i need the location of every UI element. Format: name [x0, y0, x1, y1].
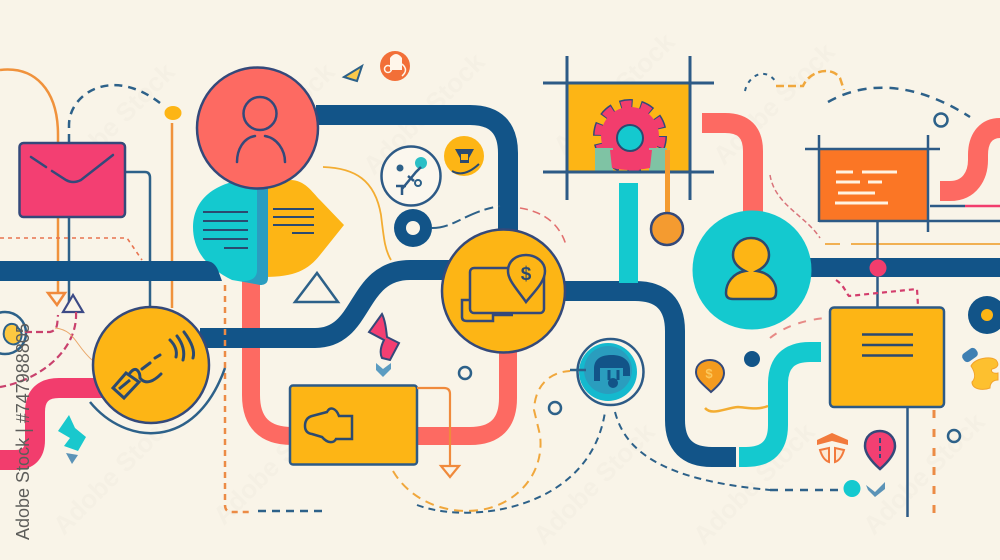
yellow bubble: [264, 180, 344, 277]
thin connector lines left: [0, 70, 172, 308]
left small icons: [0, 293, 92, 464]
gear panel: [543, 56, 714, 200]
centre strip: [240, 180, 268, 285]
coral S pipe: [940, 128, 1000, 191]
thin yellow curve: [323, 167, 391, 260]
navy pipe center: [200, 270, 450, 338]
triangle outline: [295, 273, 338, 302]
gear: [595, 105, 667, 172]
vertical credit text: Adobe Stock | #747988805: [13, 323, 33, 540]
faint watermark: Adobe Stock: [707, 36, 841, 170]
yellow panel: [568, 83, 690, 172]
pink triangle: [63, 295, 83, 312]
icon: yellow circle signal wand: [93, 307, 209, 423]
faint watermark: Adobe Stock: [47, 406, 181, 540]
icon: yellow circle with dollar pin: [442, 230, 565, 352]
icon: link and apple: [961, 346, 998, 389]
lines below note: [908, 407, 934, 517]
yellow note panel: [830, 308, 944, 407]
rings center: [459, 367, 561, 414]
navy pipe left: [0, 261, 222, 281]
faint watermark: Adobe Stock: [857, 406, 991, 540]
icon: orange badge: [380, 51, 410, 81]
icon: user circle coral: [197, 68, 318, 188]
icon: eye shield: [817, 433, 848, 462]
teal connector bar: [619, 183, 638, 283]
coral pipe lower loop: [251, 280, 508, 436]
faint watermark: Adobe Stock: [207, 396, 341, 530]
orange pin: [651, 150, 683, 245]
dotted red links: [770, 280, 918, 338]
icon: circle with branches: [382, 146, 440, 206]
orange arrowhead: [48, 293, 65, 305]
icon: yellow filter badge: [444, 136, 484, 176]
icon: user circle teal: [692, 210, 812, 330]
signal arc: [90, 368, 225, 433]
ring top right: [934, 114, 948, 126]
icon: pink bow and check: [369, 314, 399, 377]
faint watermark: Adobe Stock: [47, 56, 181, 190]
icon: bulb: [696, 360, 724, 392]
orange code panel: [805, 135, 1000, 232]
dotted orange path: [225, 285, 325, 512]
yellow hand panel: [290, 386, 417, 464]
icon: yellow circle with dollar pin: $: [521, 264, 532, 285]
speech bubbles panel: [193, 179, 344, 285]
teal dot and check: [844, 480, 885, 497]
icon: alert pin: [865, 431, 895, 469]
pink dashes: [0, 312, 76, 387]
dashed squiggles top right: [745, 71, 1000, 244]
faint watermark: Adobe Stock: [357, 46, 491, 180]
faint watermark: Adobe Stock: [207, 56, 341, 190]
icon: envelope: [20, 143, 125, 217]
dashed links center: [432, 206, 566, 245]
dashed links bottom: [393, 370, 838, 513]
icon: dart: [344, 66, 362, 81]
navy dot: [744, 351, 760, 367]
green blocks: [595, 148, 613, 172]
navy pipe far right: [806, 258, 1000, 277]
orange arrow line: [417, 388, 459, 477]
navy pipe right lower: [560, 291, 736, 457]
icon: bulb: $: [705, 366, 713, 381]
connector and pink node: [870, 221, 886, 307]
icon: teal lightning: [58, 415, 86, 464]
teal pipe right: [739, 352, 821, 457]
crop lines: [543, 56, 714, 200]
navy ring node: [394, 209, 432, 247]
teal bubble: [193, 179, 262, 285]
ring right: [948, 430, 960, 442]
faint watermark: Adobe Stock: [687, 416, 821, 550]
pink pipe left: [0, 388, 105, 460]
coral pipe top right: [702, 123, 753, 215]
navy pipe top: [316, 115, 508, 240]
wavy orange line: [705, 406, 768, 412]
faint watermark: Adobe Stock: [547, 26, 681, 160]
icon: navy badge circle: [578, 339, 644, 405]
faint watermark: Adobe Stock: [527, 416, 661, 550]
navy disc right: [968, 296, 1000, 334]
text lines: [203, 209, 314, 248]
small top icons: [344, 51, 410, 81]
yellow dot: [164, 106, 182, 120]
ring blob: [0, 312, 26, 354]
